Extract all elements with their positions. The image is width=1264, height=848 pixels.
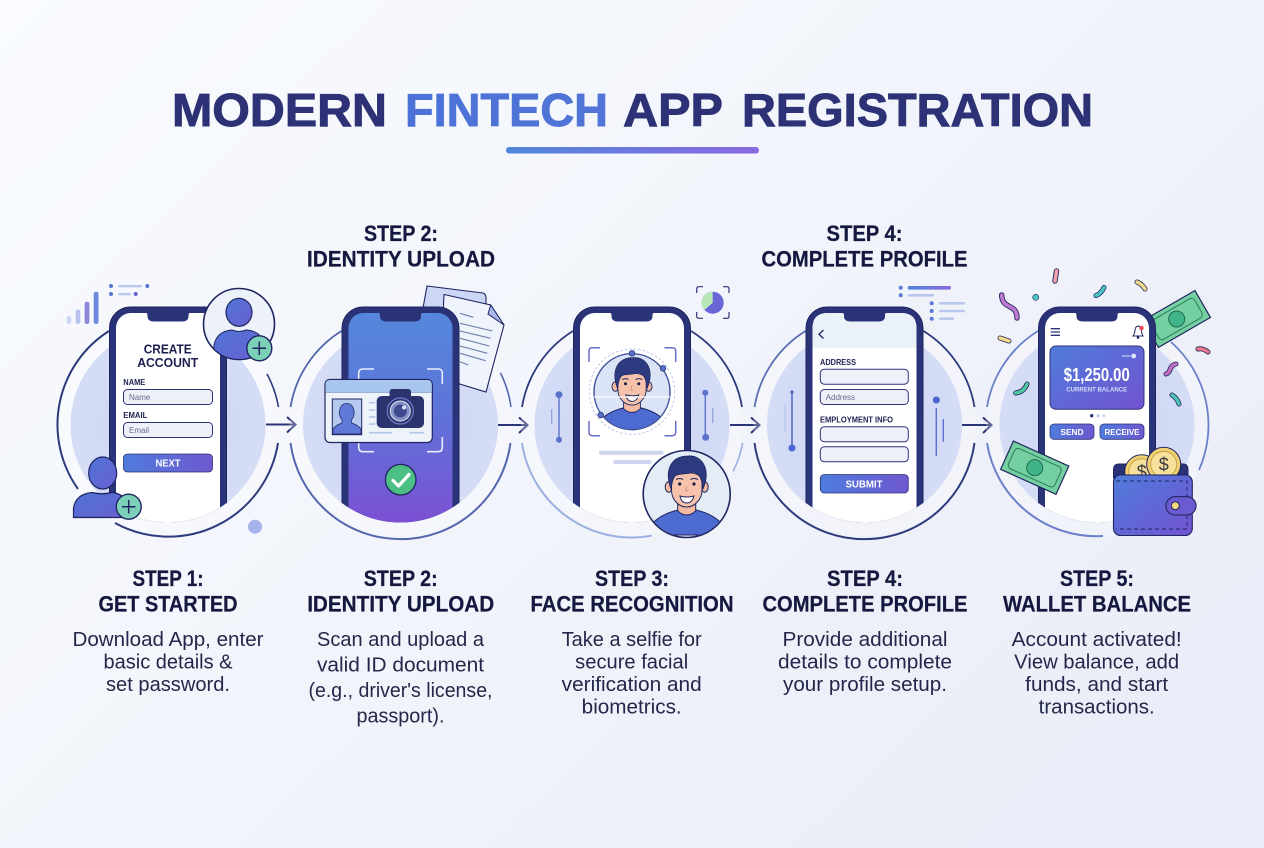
form: address fields — [820, 358, 908, 404]
decorative sensor lines left — [552, 391, 562, 443]
caption: step 3: secure facial — [575, 652, 688, 674]
button: send: SEND — [1060, 428, 1084, 437]
button: receive: RECEIVE — [1104, 428, 1140, 437]
balance card: $1,250.00 — [1064, 365, 1130, 385]
form: employment fields — [820, 415, 908, 462]
panel: step 3 illustration — [521, 286, 744, 538]
caption: step 1 — [72, 566, 264, 696]
confetti — [1000, 271, 1208, 404]
ring and disc: step 4 — [754, 314, 976, 539]
carousel dots — [1090, 414, 1105, 417]
caption: step 2: Scan and upload a — [317, 629, 485, 651]
icon: selfie portrait — [643, 450, 730, 538]
icon: banknote bottom left — [1001, 441, 1069, 494]
caption: step 3 — [530, 566, 734, 718]
top label: step 4 — [762, 221, 968, 272]
button: send — [1050, 424, 1094, 439]
caption: step 3: STEP 3: — [595, 566, 669, 591]
decorative sensor lines right — [702, 390, 713, 441]
caption: step 1: set password. — [106, 674, 230, 696]
phone: wallet balance — [1038, 306, 1156, 522]
balance card — [1050, 346, 1144, 409]
title: FINTECH — [405, 84, 608, 136]
icon: scanned pie chart — [697, 287, 729, 318]
form: email field: EMAIL — [123, 411, 147, 420]
caption: step 4: your profile setup. — [783, 674, 947, 696]
caption: step 4: COMPLETE PROFILE — [762, 592, 968, 616]
arrow: step 3 to 4 — [730, 418, 760, 433]
top label: step 2: IDENTITY UPLOAD — [307, 246, 495, 272]
top label: step 2 — [307, 221, 495, 272]
title — [172, 84, 1093, 136]
arrow: step 1 to 2 — [266, 417, 296, 432]
caption: step 4: details to complete — [778, 652, 952, 674]
form: email field — [123, 411, 212, 438]
top label: step 4: STEP 4: — [826, 221, 902, 246]
caption: step 2: STEP 2: — [364, 566, 438, 591]
caption: step 5: transactions. — [1039, 696, 1155, 718]
panel: step 4 illustration — [754, 286, 976, 540]
ring and disc: step 2 — [290, 314, 512, 539]
phone: upload screen — [342, 306, 460, 522]
caption: step 5: Account activated! — [1012, 629, 1182, 651]
caption: step 2: (e.g., driver's license, — [308, 680, 492, 702]
caption: step 5: STEP 5: — [1060, 566, 1134, 591]
form: address fields: Address — [826, 393, 855, 402]
caption: step 4: Provide additional — [782, 629, 948, 651]
caption: step 2: passport). — [356, 706, 444, 728]
title underline — [506, 147, 759, 154]
form: email field: Email — [129, 426, 149, 435]
caption: step 3: verification and — [562, 674, 702, 696]
icon: back chevron — [819, 330, 824, 338]
face scan target — [589, 348, 676, 436]
title: REGISTRATION — [742, 84, 1093, 136]
ring and disc: step 5 — [986, 314, 1208, 536]
caption: step 5 — [1003, 566, 1191, 718]
placeholder text bars — [599, 451, 664, 464]
panel: step 1 illustration — [56, 284, 280, 538]
caption: step 4 — [762, 566, 968, 696]
caption: step 1: GET STARTED — [98, 592, 238, 616]
caption: step 1: STEP 1: — [132, 566, 204, 591]
top label: step 4: COMPLETE PROFILE — [762, 246, 968, 272]
icon: wallet with coins — [1114, 447, 1196, 536]
icon: wallet with coins: $ — [1159, 454, 1169, 474]
decorative dot — [248, 520, 262, 534]
arrow: step 4 to 5 — [962, 418, 992, 433]
caption: step 3: Take a selfie for — [562, 629, 702, 651]
phone: face scan — [573, 306, 691, 522]
button: submit: SUBMIT — [846, 479, 882, 490]
panel: step 2 illustration — [290, 286, 512, 569]
form: employment fields: EMPLOYMENT INFO — [820, 415, 893, 424]
icon: wallet with coins: $ — [1137, 462, 1147, 482]
caption: step 5: funds, and start — [1025, 674, 1169, 696]
caption: step 5: View balance, add — [1014, 652, 1179, 674]
decorative sensor lines right — [933, 396, 943, 456]
heading: create account: ACCOUNT — [137, 355, 198, 370]
caption: step 4: STEP 4: — [827, 566, 903, 591]
icon: success check — [385, 464, 416, 495]
icon: camera — [377, 389, 424, 428]
form: name field: Name — [129, 393, 151, 402]
decorative data lines — [109, 284, 149, 296]
form: name field — [123, 378, 212, 404]
icon: documents — [423, 286, 504, 392]
button: receive — [1100, 424, 1144, 439]
button: submit — [820, 474, 908, 493]
icon: add user top right — [204, 288, 274, 362]
icon: banknote top right — [1143, 291, 1210, 347]
balance card: CURRENT BALANCE — [1066, 387, 1128, 394]
phone: create account — [109, 306, 227, 522]
caption: step 3: FACE RECOGNITION — [530, 592, 734, 616]
icon: add user bottom left — [74, 457, 141, 519]
caption: step 3: biometrics. — [582, 696, 682, 718]
caption: step 2: valid ID document — [317, 655, 484, 677]
form: address fields: ADDRESS — [820, 358, 857, 367]
top label: step 2: STEP 2: — [364, 221, 438, 246]
icon: menu — [1051, 329, 1060, 335]
phone: profile form — [806, 306, 924, 522]
scan frame brackets — [359, 369, 442, 452]
caption: step 2: IDENTITY UPLOAD — [307, 592, 494, 616]
caption: step 1: Download App, enter — [72, 629, 264, 651]
heading: create account — [137, 341, 198, 370]
ring and disc: step 1 — [57, 314, 279, 537]
arrow: step 2 to 3 — [498, 418, 528, 433]
icon: signal bars — [67, 292, 98, 324]
form: name field: NAME — [123, 378, 146, 387]
panel: step 5 illustration — [986, 268, 1212, 538]
caption: step 1: basic details & — [104, 652, 233, 674]
title: MODERN — [172, 84, 387, 136]
icon: notification bell — [1133, 326, 1144, 339]
button: next: NEXT — [156, 458, 180, 470]
button: next — [124, 454, 212, 472]
caption: step 2 — [307, 566, 494, 728]
decorative sensor lines left — [785, 390, 796, 452]
heading: create account: CREATE — [144, 341, 192, 356]
decorative data lines — [899, 286, 965, 321]
caption: step 5: WALLET BALANCE — [1003, 592, 1191, 616]
title: APP — [623, 84, 723, 136]
ring and disc: step 3 — [521, 314, 743, 538]
id card — [325, 380, 432, 442]
